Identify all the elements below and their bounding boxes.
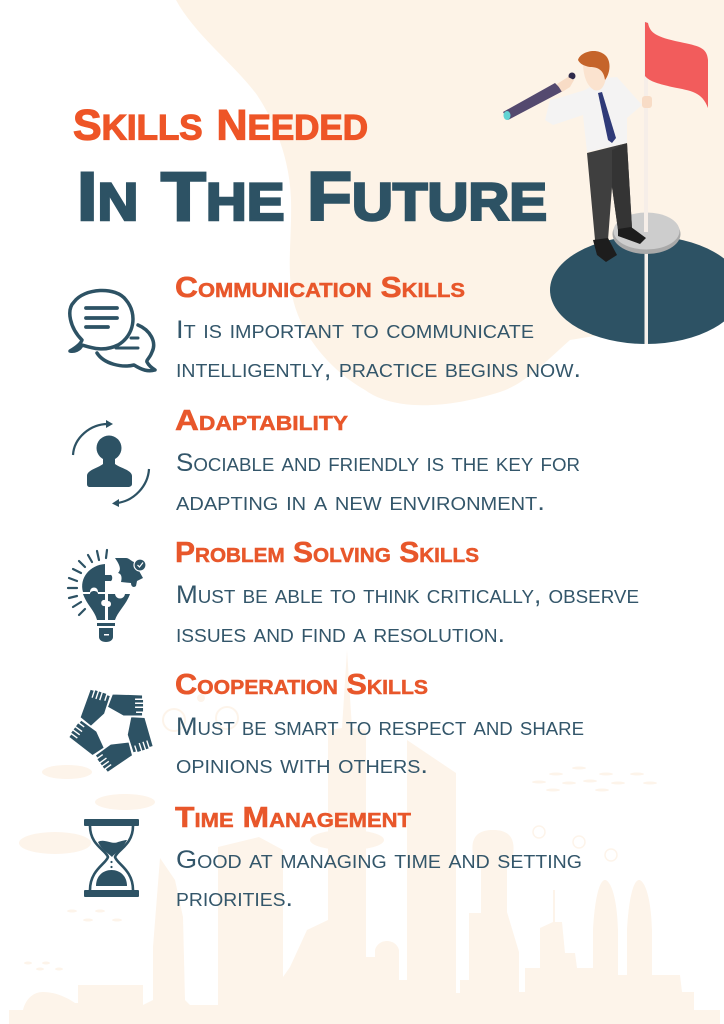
heading: Adaptability	[175, 405, 349, 437]
description	[176, 581, 639, 648]
description	[176, 316, 581, 383]
icon: ring of hands	[67, 688, 154, 774]
title	[73, 94, 547, 237]
description: intelligently, practice begins now.	[176, 355, 581, 383]
description: It is important to communicate	[176, 316, 534, 344]
skill 3: problem solving	[68, 537, 639, 648]
illustration: man with telescope on disc	[503, 22, 724, 344]
flag	[645, 22, 708, 108]
description	[176, 713, 584, 779]
tie	[598, 92, 616, 143]
description: Must be smart to respect and share	[176, 713, 584, 741]
disc	[550, 236, 724, 344]
hands	[557, 77, 574, 92]
heading: Problem Solving Skills	[175, 537, 479, 569]
skill 5: time management	[84, 802, 582, 912]
icon: speech bubbles	[70, 290, 155, 371]
description	[176, 846, 582, 912]
skill 4: cooperation	[67, 669, 584, 779]
skyline background	[9, 650, 720, 1024]
description: opinions with others.	[176, 751, 428, 779]
icon: hourglass	[84, 819, 139, 897]
description: issues and find a resolution.	[176, 620, 505, 648]
description: Must be able to think critically, observe	[176, 581, 639, 609]
description: Sociable and friendly is the key for	[176, 449, 580, 477]
title line: skills needed: Skills Needed	[73, 94, 368, 150]
head	[583, 62, 606, 90]
shirt	[545, 77, 642, 152]
telescope	[503, 83, 563, 120]
icon: puzzle light bulb	[68, 550, 146, 642]
trousers	[587, 143, 632, 240]
description: adapting in a new environment.	[176, 488, 545, 516]
description: Good at managing time and setting	[176, 846, 582, 874]
flag pole	[644, 22, 648, 232]
heading: Cooperation Skills	[175, 669, 428, 701]
background blob	[176, 0, 724, 405]
icon: person with arrows	[73, 420, 149, 507]
description: priorities.	[176, 884, 293, 912]
description	[176, 449, 580, 516]
hair	[578, 51, 610, 80]
heading: Communication Skills	[175, 272, 465, 304]
plate	[612, 214, 680, 254]
title line: in the future: In The Future	[77, 152, 547, 237]
skill 2: adaptability	[73, 405, 580, 516]
shoes	[593, 238, 617, 262]
heading: Time Management	[175, 802, 411, 834]
skill 1: communication	[70, 272, 581, 383]
